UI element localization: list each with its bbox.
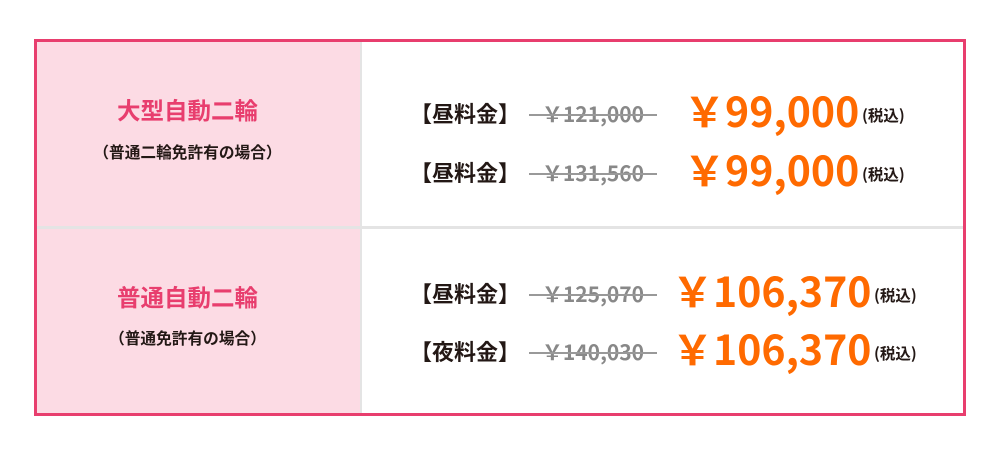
pricing table	[34, 39, 966, 416]
old price: row 4: ￥140,030	[542, 336, 644, 366]
tax note: row 1: (税込)	[862, 104, 905, 126]
price: row 1: ￥99,000	[684, 79, 859, 139]
strike line: row 1	[529, 114, 657, 116]
price: row 4: ￥106,370	[672, 317, 871, 377]
row divider	[34, 226, 966, 229]
old price: row 1: ￥121,000	[542, 98, 644, 128]
price: row 2: ￥99,000	[684, 138, 859, 198]
strike line: row 3	[529, 294, 657, 296]
tax note: row 2: (税込)	[862, 163, 905, 185]
tax note: row 3: (税込)	[874, 284, 917, 306]
heading: large motorcycle: 大型自動二輪	[117, 92, 258, 126]
old price: row 3: ￥125,070	[542, 278, 644, 308]
label: row 4: 【夜料金】	[410, 335, 520, 367]
label: row 3: 【昼料金】	[410, 277, 520, 309]
text: standard motorcycle note: （普通免許有の場合）	[109, 326, 266, 348]
text: large motorcycle note: （普通二輪免許有の場合）	[93, 140, 282, 162]
table border	[34, 39, 966, 416]
column divider	[360, 39, 362, 416]
strike line: row 2	[529, 173, 657, 175]
panel: left column background	[34, 39, 362, 416]
heading: standard motorcycle: 普通自動二輪	[117, 279, 258, 313]
label: row 1: 【昼料金】	[410, 97, 520, 129]
strike line: row 4	[529, 352, 657, 354]
tax note: row 4: (税込)	[874, 342, 917, 364]
price: row 3: ￥106,370	[672, 259, 871, 319]
old price: row 2: ￥131,560	[542, 158, 644, 188]
label: row 2: 【昼料金】	[410, 156, 520, 188]
